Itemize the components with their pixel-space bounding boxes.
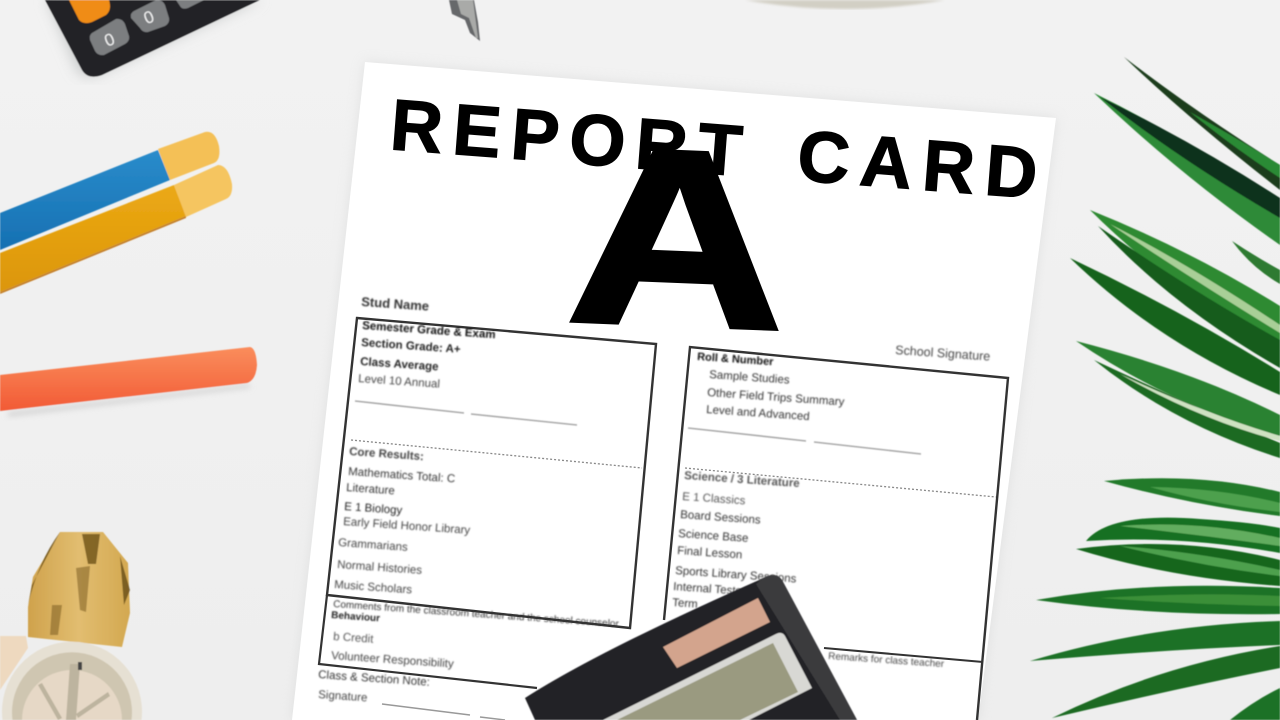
icon: wrist watch	[0, 532, 142, 720]
left box text lines	[318, 320, 620, 704]
right box text lines: Sports Library Sessions	[675, 565, 797, 585]
plant leaves	[1030, 57, 1280, 720]
key zero left	[90, 19, 129, 55]
right box text lines: Internal Tests	[673, 581, 742, 598]
student name label: Stud Name	[361, 294, 430, 314]
report card paper	[292, 62, 1056, 720]
left box text lines: Semester Grade & Exam	[362, 320, 496, 341]
right box text lines: Board Sessions	[680, 509, 761, 527]
right box text lines: E 1 Classics	[682, 491, 746, 507]
lower frond	[1030, 478, 1280, 720]
right box text lines: Science Base	[678, 528, 749, 545]
right box text lines: Roll & Number	[697, 351, 775, 368]
right box text lines: Science / 3 Literature	[684, 470, 800, 490]
heading: report card	[388, 85, 1040, 214]
icon: calculator bottom	[525, 575, 857, 720]
left box text lines: E 1 Biology	[344, 501, 403, 517]
display frame	[603, 633, 812, 720]
grade letter A: A	[564, 94, 792, 382]
watch case	[2, 642, 142, 720]
left box text lines: Comments from the classroom teacher and the school counselor	[333, 599, 620, 630]
icon: blue pencil	[0, 132, 219, 250]
left box text lines: Early Field Honor Library	[343, 516, 471, 537]
left box text lines: Mathematics Total: C	[348, 466, 456, 485]
key zero right: 0	[141, 7, 157, 28]
solar panel	[663, 598, 770, 668]
panel: left grade box	[318, 318, 656, 720]
right box text lines: School Signature	[895, 343, 991, 364]
left box text lines: Grammarians	[338, 537, 408, 554]
panel: right grade box	[664, 343, 1008, 720]
orange key	[69, 0, 110, 23]
key zero left: 0	[102, 29, 118, 51]
left box text lines: Normal Histories	[337, 559, 423, 577]
right box text lines: Level and Advanced	[706, 404, 810, 423]
right box text lines: Term	[672, 597, 698, 611]
left box text lines: Literature	[346, 482, 395, 497]
right box text lines	[672, 343, 991, 670]
left box text lines: Section Grade: A+	[361, 337, 461, 356]
key zero right	[131, 0, 169, 32]
upper frond	[1070, 57, 1280, 458]
icon: calculator top left	[45, 0, 262, 77]
right box text lines: Remarks for class teacher	[828, 651, 945, 670]
left box text lines: Class & Section Note:	[318, 669, 430, 689]
icon: orange marker	[0, 347, 257, 417]
left box text lines: b Credit	[333, 631, 375, 646]
left box text lines: Class Average	[360, 356, 439, 373]
watch strap	[28, 532, 130, 647]
left box text lines: Core Results:	[349, 446, 424, 463]
icon: compass tip	[449, 0, 480, 41]
left box text lines: Signature	[318, 689, 368, 704]
display screen	[617, 643, 798, 720]
left box text lines: Level 10 Annual	[358, 373, 440, 391]
bowl edge at top	[745, 0, 945, 9]
icon: yellow pencil	[0, 165, 232, 294]
right box text lines: Final Lesson	[677, 545, 743, 562]
right box text lines: Other Field Trips Summary	[707, 387, 845, 409]
left box text lines: Music Scholars	[334, 579, 413, 596]
heading: report card: REPORT	[388, 85, 745, 192]
heading: report card: CARD	[795, 116, 1040, 214]
left box text lines: Behaviour	[331, 610, 380, 624]
left box text lines: Volunteer Responsibility	[331, 650, 454, 671]
right box text lines: Sample Studies	[709, 369, 790, 387]
